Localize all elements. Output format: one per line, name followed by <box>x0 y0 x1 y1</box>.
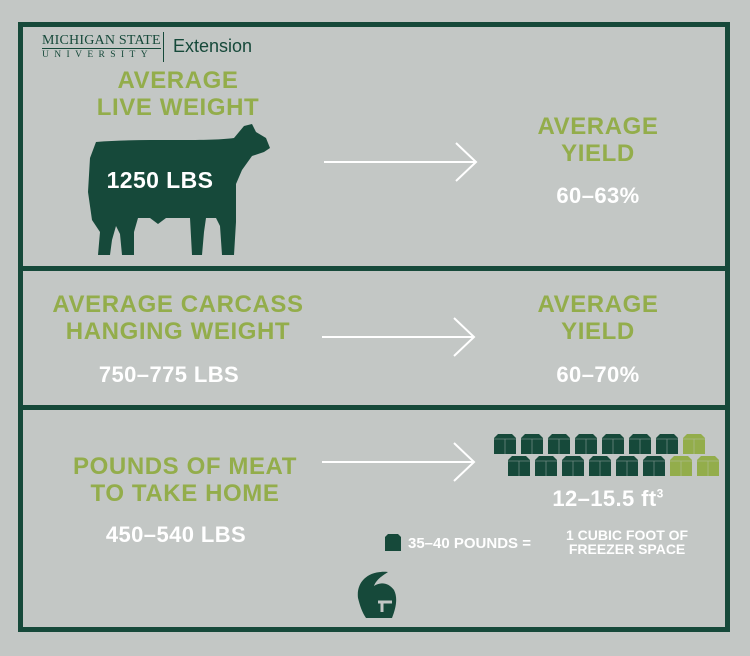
logo: MICHIGAN STATE <box>42 33 161 48</box>
arrow 1 <box>324 142 478 182</box>
heading: pounds of meat: POUNDS OF MEAT <box>73 453 297 480</box>
heading: average live weight <box>97 67 259 121</box>
heading: carcass hanging weight: HANGING WEIGHT <box>66 318 290 345</box>
text: 60-70%: 60–70% <box>556 362 640 387</box>
heading: carcass hanging weight <box>52 291 304 345</box>
icon: spartan helmet <box>358 572 396 618</box>
logo: Extension <box>173 36 252 56</box>
heading: average live weight: AVERAGE <box>117 67 239 94</box>
icon: cow <box>88 124 270 255</box>
cube grid <box>494 434 719 476</box>
heading: average yield 1 <box>537 113 659 167</box>
text: 450-540 lbs: 450–540 LBS <box>106 522 246 547</box>
heading: average live weight: LIVE WEIGHT <box>97 94 259 121</box>
heading: average yield 2 <box>537 291 659 345</box>
legend: 1 CUBIC FOOT OF <box>566 527 688 543</box>
heading: carcass hanging weight: AVERAGE CARCASS <box>52 291 304 318</box>
heading: average yield 2: YIELD <box>561 318 635 345</box>
heading: average yield 1: AVERAGE <box>537 113 659 140</box>
text: 12-15.5 ft3: 12–15.5 ft3 <box>552 486 664 511</box>
legend: 35–40 POUNDS = <box>408 535 531 552</box>
legend <box>385 527 688 557</box>
heading: pounds of meat: TO TAKE HOME <box>90 480 279 507</box>
heading: average yield 1: YIELD <box>561 140 635 167</box>
text: 60-63%: 60–63% <box>556 183 640 208</box>
logo <box>42 32 252 62</box>
text: 750-775 lbs: 750–775 LBS <box>99 362 239 387</box>
heading: pounds of meat <box>73 453 297 507</box>
arrow 3 <box>322 442 476 482</box>
logo: UNIVERSITY <box>42 50 153 60</box>
arrow 2 <box>322 317 476 357</box>
heading: average yield 2: AVERAGE <box>537 291 659 318</box>
legend: FREEZER SPACE <box>569 541 685 557</box>
text: 1250 lbs: 1250 LBS <box>107 167 213 193</box>
